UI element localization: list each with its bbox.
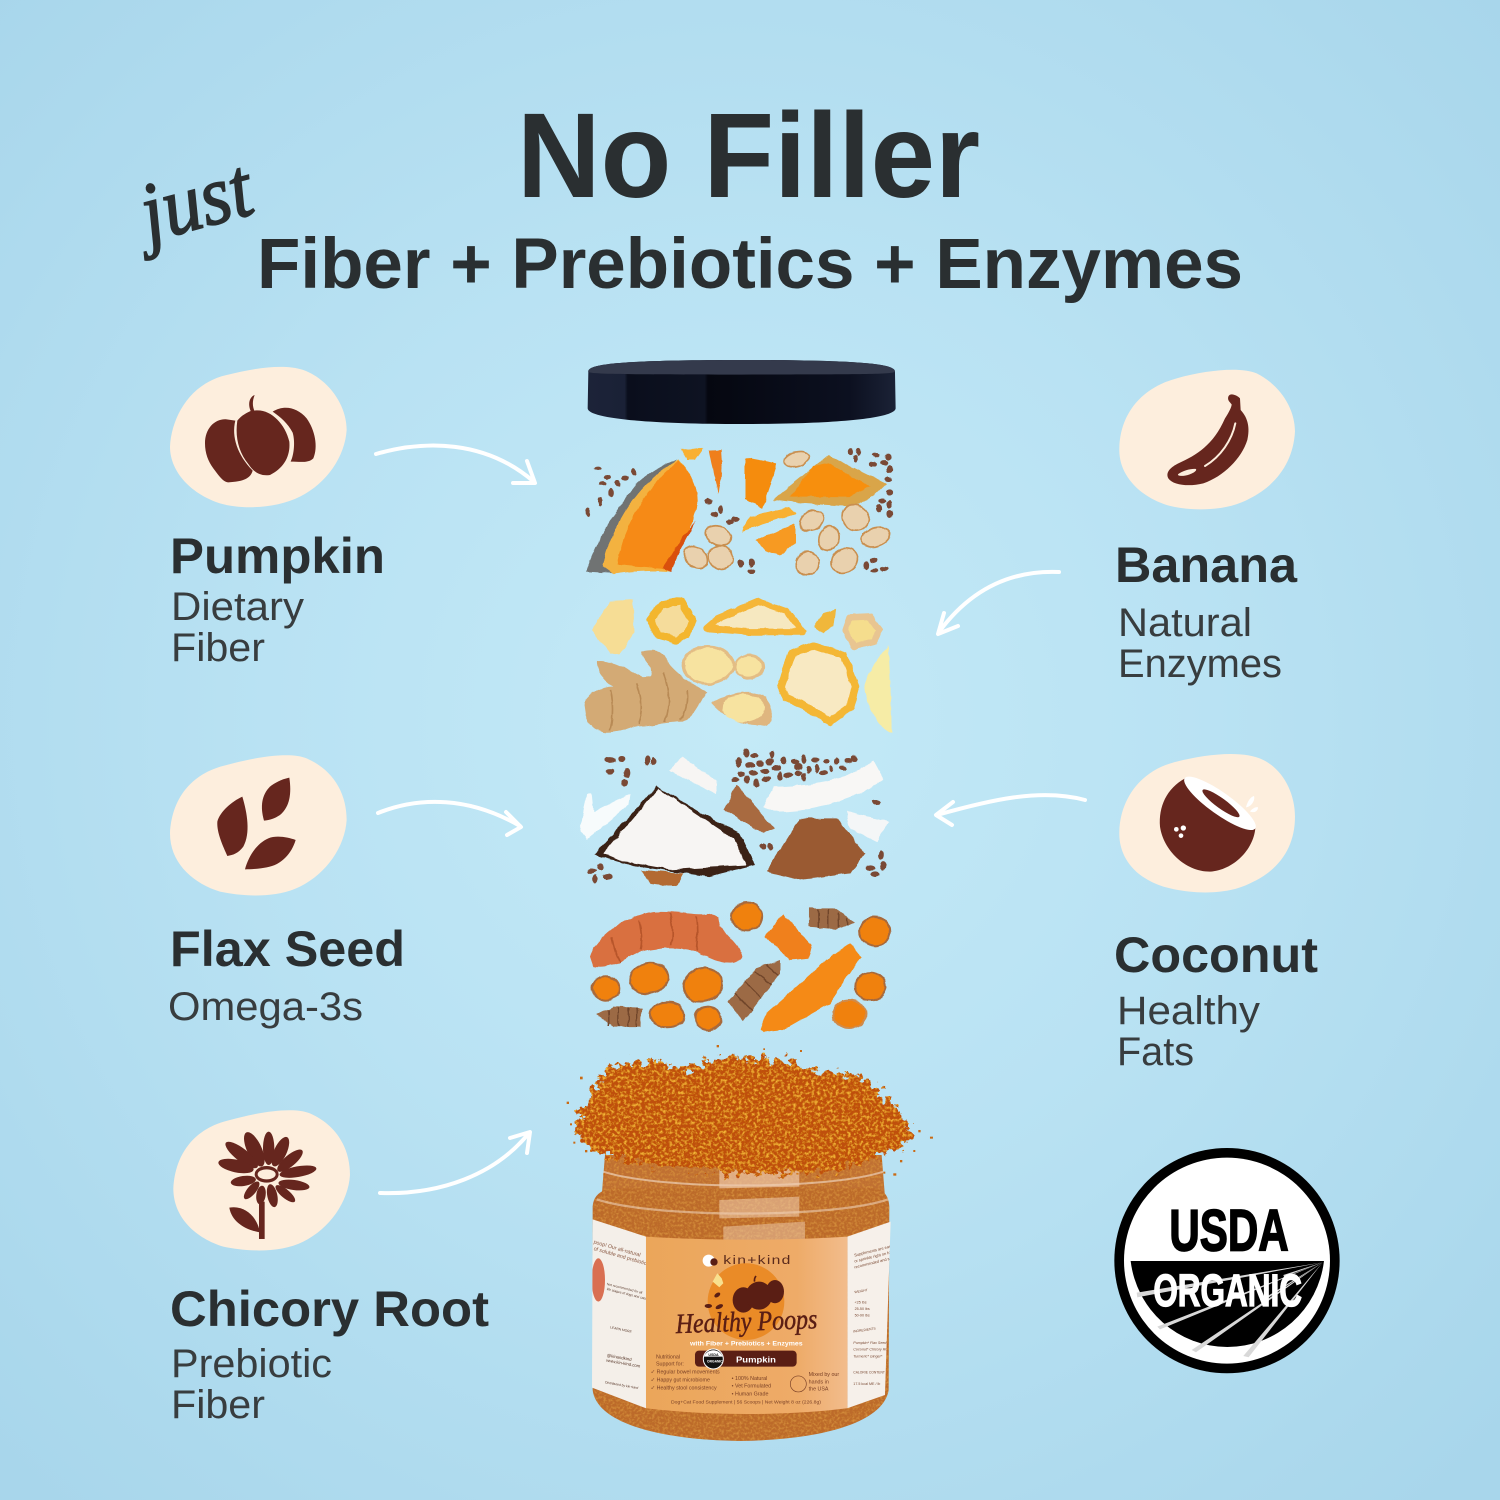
right side panel: Supplements are easy to: [854, 1242, 898, 1258]
ingredient: flax seed: [168, 755, 405, 1029]
right side panel: Pumpkin* Flax Seed*: [853, 1341, 888, 1345]
label: Chicory Root Prebiotic Fiber: Chicory Root: [170, 1281, 489, 1337]
right side panel: INGREDIENTS: [853, 1326, 877, 1334]
icon: chicory flower: [173, 1110, 350, 1250]
label: Flax Seed Omega-3s: Omega-3s: [168, 985, 363, 1029]
ingredient: chicory root: [170, 1110, 489, 1427]
right side panel: CALORIE CONTENT: [853, 1370, 885, 1374]
label: Banana Natural Enzymes: Natural: [1118, 601, 1252, 645]
label: Pumpkin Dietary Fiber: Fiber: [171, 626, 265, 670]
jar lid: [588, 360, 896, 424]
label: Banana Natural Enzymes: [1115, 537, 1298, 686]
label brand: [703, 1253, 792, 1267]
label claims: the USA: [809, 1387, 829, 1393]
left side panel: Not recommended for all: [606, 1282, 643, 1295]
label claims: ✓ Healthy stool consistency: [651, 1385, 717, 1391]
arrow: pumpkin to jar: [376, 446, 535, 483]
label claims: Dog+Cat Food Supplement | 56 Scoops | Net Weight 8 oz (226.8g): [671, 1399, 822, 1404]
label product name: Healthy Poops: [674, 1304, 818, 1340]
label claims: ✓ Happy gut microbiome: [651, 1377, 710, 1383]
USDA Organic seal: [1114, 1148, 1340, 1373]
label: Flax Seed Omega-3s: [168, 921, 405, 1029]
label claims: • Human Grade: [732, 1391, 768, 1397]
label: Coconut Healthy Fats: Healthy: [1117, 989, 1260, 1033]
pumpkin seeds: [679, 449, 893, 580]
label: Coconut Healthy Fats: [1114, 927, 1318, 1074]
label claims: • Vet Formulated: [732, 1384, 771, 1390]
food layer: turmeric: [590, 903, 890, 1033]
left side panel: Distributed by kin+kind: [605, 1380, 639, 1390]
left side panel: www.kin-kind.com: [606, 1358, 641, 1369]
right side panel: Coconut* Chicory Root*: [853, 1348, 892, 1352]
ingredient: banana: [1115, 370, 1298, 686]
icon: flax seeds: [170, 755, 347, 895]
label illustration: [705, 1263, 784, 1340]
right side panel: or sprinkle right on food: [854, 1249, 895, 1264]
label flavor pill: USDA: [708, 1353, 719, 1357]
script word: just: just: [122, 141, 264, 262]
label: Chicory Root Prebiotic Fiber: Prebiotic: [171, 1342, 332, 1386]
main label: [646, 1237, 847, 1414]
icon: banana: [1119, 370, 1295, 509]
label: Banana Natural Enzymes: Enzymes: [1118, 642, 1282, 686]
title: No Filler: [517, 87, 980, 223]
label: Pumpkin Dietary Fiber: [170, 528, 385, 670]
label brand: kin+kind: [723, 1253, 792, 1267]
right side panel: Turmeric* Ginger*: [853, 1354, 883, 1358]
right side panel: recommended and serving: [854, 1253, 901, 1270]
product jar with powder: with Fiber + Prebiotics + Enzymes: [689, 1342, 803, 1348]
left side panel: [592, 1219, 647, 1408]
label claims: [651, 1354, 839, 1404]
right side panel: <25 lbs: [855, 1300, 867, 1304]
label flavor pill: ORGANIC: [707, 1360, 723, 1364]
left side panel: LEARN MORE: [610, 1325, 633, 1334]
jar neck: [602, 1155, 885, 1197]
label claims: Support for:: [656, 1361, 684, 1367]
USDA Organic seal: USDA: [1169, 1198, 1289, 1263]
label: Coconut Healthy Fats: Coconut: [1114, 927, 1318, 983]
ingredient: coconut: [1114, 754, 1318, 1074]
label: Chicory Root Prebiotic Fiber: [170, 1281, 489, 1427]
left side panel: @kinandkind: [606, 1353, 633, 1362]
left side panel: life stages of dogs and cats: [606, 1287, 647, 1301]
flax scatter: [587, 448, 893, 573]
arrow: coconut to jar: [936, 795, 1085, 825]
ingredient: pumpkin: [170, 367, 385, 670]
right side panel: [847, 1222, 891, 1408]
arrow: chicory to jar: [380, 1132, 530, 1193]
label claims: • 100% Natural: [732, 1376, 767, 1382]
right side panel: WEIGHT: [854, 1288, 868, 1294]
label claims: Mixed by our: [809, 1372, 839, 1378]
label: Pumpkin Dietary Fiber: Dietary: [171, 585, 304, 629]
jar body: [593, 1168, 889, 1441]
arrow: banana to jar: [938, 572, 1059, 634]
label claims: hands in: [809, 1379, 829, 1385]
left side panel: of soluble and prebiotic: [593, 1246, 647, 1267]
label claims: Nutritional: [656, 1354, 680, 1360]
label claims: ✓ Regular bowel movements: [651, 1369, 720, 1375]
icon: pumpkin: [170, 367, 347, 507]
label: Pumpkin Dietary Fiber: Pumpkin: [170, 528, 385, 584]
USDA Organic seal: ORGANIC: [1153, 1265, 1302, 1316]
label: Flax Seed Omega-3s: Flax Seed: [170, 921, 405, 977]
subtitle: Fiber + Prebiotics + Enzymes: [257, 225, 1243, 304]
label flavor pill: [695, 1349, 797, 1369]
label flavor pill: Pumpkin: [736, 1354, 776, 1364]
product jar with powder: [567, 1045, 933, 1441]
label: Chicory Root Prebiotic Fiber: Fiber: [171, 1383, 265, 1427]
label: Coconut Healthy Fats: Fats: [1117, 1030, 1194, 1074]
arrow: flax to jar: [378, 802, 521, 835]
right side panel: 25-50 lbs: [855, 1307, 870, 1311]
right side panel: 50-90 lbs: [855, 1314, 870, 1318]
right side panel: 17.5 kcal ME / lb: [853, 1382, 880, 1386]
flax cluster: [588, 750, 885, 883]
left side panel: poop! Our all-natural: [593, 1239, 641, 1259]
food layer: coconut and flax: [580, 750, 888, 887]
powder mound: [567, 1045, 933, 1176]
label: Banana Natural Enzymes: Banana: [1115, 537, 1298, 593]
food layer: banana and ginger: [584, 600, 892, 733]
icon: coconut: [1119, 754, 1295, 892]
food layer: pumpkin and seeds: [586, 448, 893, 580]
